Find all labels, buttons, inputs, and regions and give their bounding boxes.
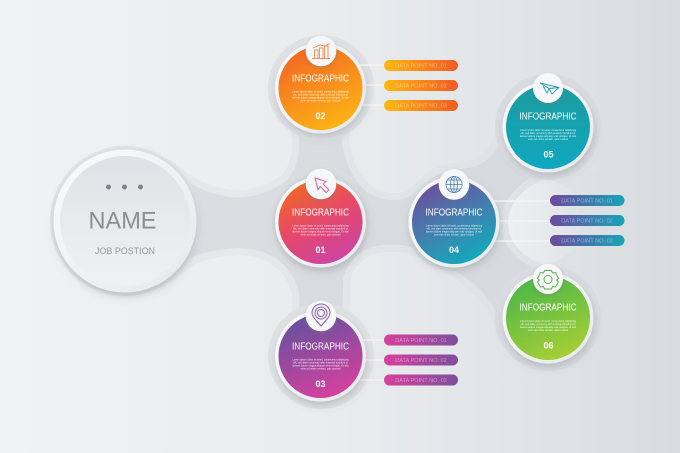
body 01 xyxy=(292,224,349,236)
body 01: laoreet dolore magna aliquam erat volutpat. Ut wisi xyxy=(292,230,349,234)
body 03: elit, sed diam nonummy nibh euismod tincidunt ut xyxy=(293,362,348,364)
body 05: Lorem ipsum dolor sit amet, consectetur adipiscing xyxy=(520,129,577,132)
pills 02: DATA POINT NO. 02 xyxy=(395,84,447,90)
body 03: Lorem ipsum dolor sit amet, consectetur adipiscing xyxy=(292,358,349,362)
number 06: 06 xyxy=(543,340,554,350)
body 06 xyxy=(520,320,577,332)
body 02: laoreet dolore magna aliquam erat volutpat. Ut wisi xyxy=(292,96,349,100)
body 05: elit, sed diam nonummy nibh euismod tincidunt ut xyxy=(521,132,576,135)
three dots xyxy=(106,184,143,190)
heading 06: INFOGRAPHIC xyxy=(520,302,577,314)
profile circle xyxy=(54,150,196,292)
pills 04: DATA POINT NO. 01 xyxy=(561,198,613,204)
data lines 03 xyxy=(358,340,386,380)
body 02: enim ad minim veniam, quis nostrud xyxy=(300,100,341,102)
number 04: 04 xyxy=(449,245,459,255)
job position: JOB POSTION xyxy=(95,246,155,256)
body 04: Lorem ipsum dolor sit amet, consectetur adipiscing xyxy=(426,224,483,228)
pills 02: DATA POINT NO. 01 xyxy=(395,64,447,70)
number 01: 01 xyxy=(315,245,326,255)
body 06: laoreet dolore magna aliquam erat volutpat. Ut wisi xyxy=(520,326,577,329)
circle 01 xyxy=(275,169,366,268)
icon: paper plane xyxy=(540,83,559,94)
circle 05 xyxy=(502,73,594,172)
pills 03: DATA POINT NO. 01 xyxy=(395,338,447,344)
body 04: laoreet dolore magna aliquam erat volutpat. Ut wisi xyxy=(426,230,483,234)
circle 02 xyxy=(275,36,366,134)
badge 02 xyxy=(306,36,336,66)
body 05 xyxy=(520,129,577,141)
body 03 xyxy=(292,358,349,370)
pills 02: DATA POINT NO. 03 xyxy=(395,104,447,110)
number 03: 03 xyxy=(315,379,326,389)
body 01: Lorem ipsum dolor sit amet, consectetur adipiscing xyxy=(292,224,349,228)
body 04 xyxy=(426,224,483,236)
heading 04: INFOGRAPHIC xyxy=(426,206,483,218)
body 02 xyxy=(292,90,349,102)
badge 03 xyxy=(306,301,336,331)
data lines 04 xyxy=(491,201,552,241)
heading 05: INFOGRAPHIC xyxy=(520,110,577,122)
circle 03 xyxy=(275,301,366,402)
pills 04 xyxy=(550,195,624,246)
body 03: laoreet dolore magna aliquam erat volutpat. Ut wisi xyxy=(292,364,349,368)
number 02: 02 xyxy=(315,111,326,121)
body 06: Lorem ipsum dolor sit amet, consectetur adipiscing xyxy=(520,320,577,323)
badge 04 xyxy=(439,169,469,200)
pills 03: DATA POINT NO. 03 xyxy=(395,378,447,384)
body 05: enim ad minim veniam, quis nostrud xyxy=(528,138,569,141)
pills 03 xyxy=(384,334,458,386)
icon: cursor xyxy=(315,178,329,192)
heading 03: INFOGRAPHIC xyxy=(292,340,349,352)
pills 02 xyxy=(384,60,458,111)
body 01: enim ad minim veniam, quis nostrud xyxy=(300,234,341,236)
name: NAME xyxy=(88,208,156,234)
heading 01: INFOGRAPHIC xyxy=(292,206,349,218)
badge 01 xyxy=(306,169,336,199)
body 03: enim ad minim veniam, quis nostrud xyxy=(300,368,341,370)
pills 03: DATA POINT NO. 02 xyxy=(395,358,447,364)
pills 04: DATA POINT NO. 03 xyxy=(561,238,613,244)
body 04: enim ad minim veniam, quis nostrud xyxy=(434,234,475,236)
icon: gear xyxy=(538,270,558,289)
number 05: 05 xyxy=(543,150,554,160)
body 04: elit, sed diam nonummy nibh euismod tincidunt ut xyxy=(427,228,482,230)
circle 06 xyxy=(502,264,594,364)
body 05: laoreet dolore magna aliquam erat volutpat. Ut wisi xyxy=(520,135,577,138)
body 02: Lorem ipsum dolor sit amet, consectetur adipiscing xyxy=(292,90,349,94)
heading 02: INFOGRAPHIC xyxy=(292,72,349,84)
data lines 02 xyxy=(358,65,386,105)
badge 05 xyxy=(533,73,563,103)
pills 04: DATA POINT NO. 02 xyxy=(561,218,613,224)
body 06: enim ad minim veniam, quis nostrud xyxy=(528,329,569,332)
body 06: elit, sed diam nonummy nibh euismod tincidunt ut xyxy=(521,323,576,326)
circle 04 xyxy=(408,169,500,268)
badge 06 xyxy=(533,264,563,294)
icon: globe xyxy=(446,176,462,192)
connector network xyxy=(50,35,532,409)
body 01: elit, sed diam nonummy nibh euismod tincidunt ut xyxy=(293,228,348,230)
icon: bar chart xyxy=(312,44,330,58)
icon: map pin xyxy=(312,304,330,326)
body 02: elit, sed diam nonummy nibh euismod tincidunt ut xyxy=(293,94,348,96)
